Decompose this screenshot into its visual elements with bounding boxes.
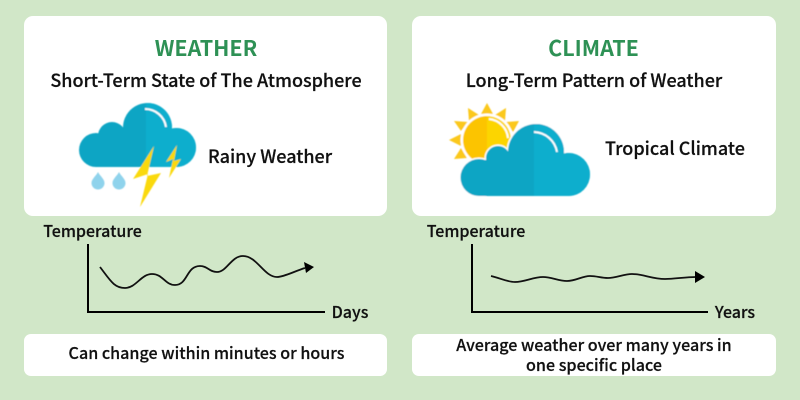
line: stable temperature <box>491 274 696 282</box>
axis label: days: Days <box>332 299 369 323</box>
label: rainy weather: Rainy Weather <box>208 143 333 169</box>
axes <box>88 244 325 312</box>
arrowhead <box>304 262 314 273</box>
callout: climate <box>412 332 776 376</box>
subtitle: climate: Long-Term Pattern of Weather <box>466 67 723 93</box>
chart: weather temperature over days <box>43 218 369 323</box>
callout: climate: one specific place <box>526 352 662 376</box>
axis label: temperature: Temperature <box>43 218 142 242</box>
arrowhead <box>695 271 705 283</box>
line: variable temperature <box>100 256 305 288</box>
heading: climate: CLIMATE <box>548 32 639 63</box>
axis label: temperature: Temperature <box>427 218 525 242</box>
axes <box>472 244 708 312</box>
callout: weather: Can change within minutes or hours <box>69 340 345 364</box>
chart: climate temperature over years <box>427 218 755 323</box>
callout: weather <box>24 334 387 376</box>
panel: weather <box>24 16 387 216</box>
heading: weather: WEATHER <box>155 32 258 63</box>
axis label: years: Years <box>714 299 755 323</box>
icon: rain cloud with lightning <box>79 103 196 207</box>
icon: sun and cloud <box>449 103 590 196</box>
callout: climate: Average weather over many years in <box>456 332 732 356</box>
label: tropical climate: Tropical Climate <box>605 135 745 161</box>
subtitle: weather: Short-Term State of The Atmosphere <box>50 67 362 93</box>
panel: climate <box>412 16 776 216</box>
